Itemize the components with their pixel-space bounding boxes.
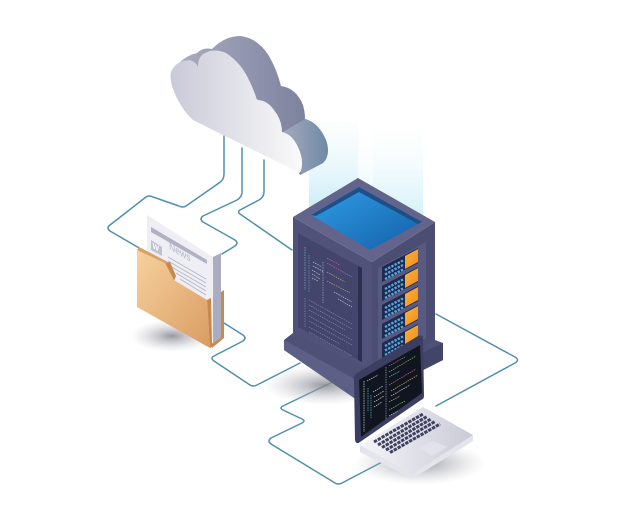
document text lines [168, 257, 206, 295]
light beams above server [309, 122, 423, 222]
body right face [372, 222, 435, 372]
laptop shadow [354, 441, 486, 485]
document face [147, 215, 213, 340]
folder back [212, 290, 224, 348]
folder with news document [137, 215, 224, 348]
screen code [364, 356, 418, 432]
screen display [359, 345, 422, 437]
logo letter: W [152, 241, 159, 254]
document heading band [151, 227, 207, 264]
connection lines [108, 136, 518, 484]
orange lights [405, 249, 418, 269]
folder right edge [207, 298, 215, 348]
server shadow [263, 365, 387, 405]
folder tab edge [165, 262, 176, 281]
document logo [151, 240, 162, 256]
keyboard [374, 414, 440, 452]
trackpad [418, 441, 447, 456]
folder rim [137, 247, 168, 264]
top recess [311, 187, 422, 250]
laptop deck [360, 407, 473, 474]
laptop base front edge [360, 435, 473, 479]
folder front [137, 250, 210, 348]
rack slot recess [378, 242, 426, 362]
rack units [382, 248, 418, 358]
screen lid [354, 335, 424, 443]
top frame [293, 178, 435, 262]
document title: News [169, 241, 191, 265]
base [284, 333, 443, 402]
laptop [354, 335, 473, 479]
body left face [293, 217, 372, 372]
code lines [305, 247, 352, 356]
document side [213, 253, 221, 343]
cloud [170, 36, 328, 175]
folder shadow [130, 320, 214, 352]
blue key grids [385, 260, 403, 355]
code panel [298, 233, 362, 362]
server rack [284, 178, 443, 402]
